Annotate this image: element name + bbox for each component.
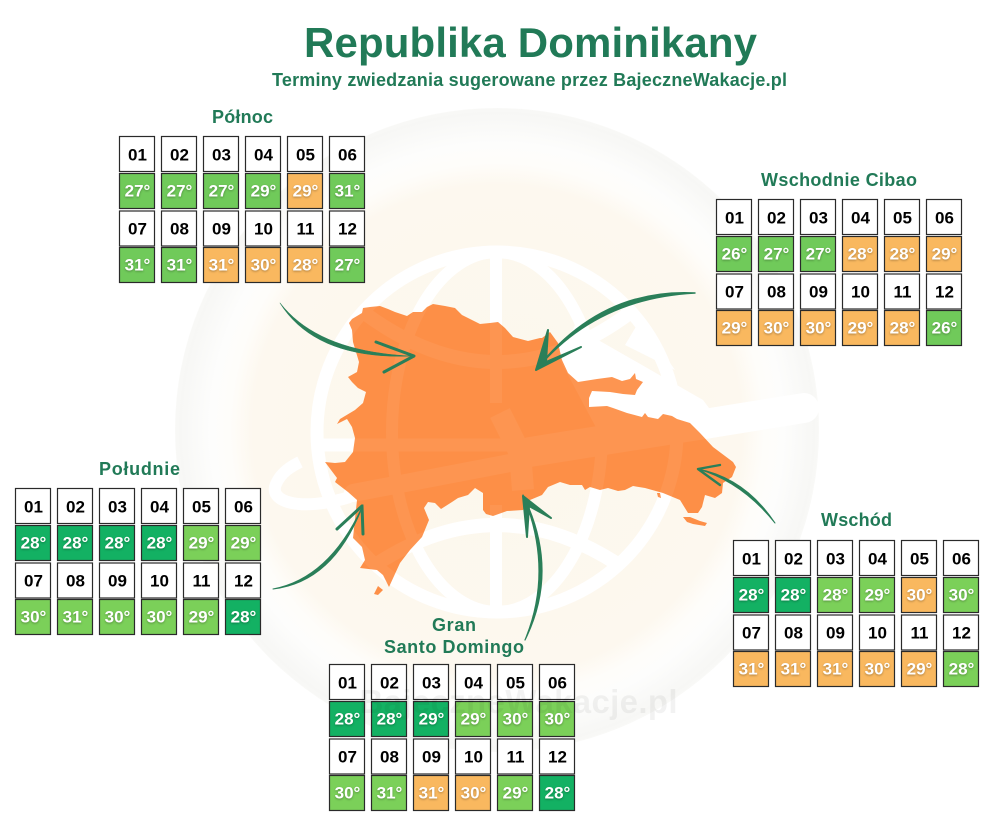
grid: Wschód months and temperatures: 02	[784, 550, 803, 568]
grid: Wschód months and temperatures: 11	[911, 624, 928, 642]
grid: Wschodnie Cibao months and temperatures: 08	[767, 282, 786, 302]
heading: Gran Santo Domingo: Santo Domingo	[384, 637, 524, 657]
grid: Wschód months and temperatures: 07	[742, 624, 761, 642]
grid: Wschodnie Cibao months and temperatures: 10	[851, 282, 870, 302]
grid: Północ months and temperatures: 28°	[293, 256, 319, 274]
grid: Wschodnie Cibao months and temperatures: 30°	[764, 318, 790, 338]
grid: Wschodnie Cibao months and temperatures: 30°	[806, 318, 832, 338]
grid: Wschodnie Cibao months and temperatures: 26°	[932, 318, 958, 338]
grid: Wschód months and temperatures: 28°	[739, 586, 765, 604]
grid: Wschód months and temperatures: 31°	[781, 660, 807, 678]
grid: Południe months and temperatures	[16, 488, 260, 634]
grid: Południe months and temperatures: 30°	[105, 608, 131, 626]
background watermark: globe and plane	[175, 108, 819, 752]
grid: Wschodnie Cibao months and temperatures: 01	[725, 208, 744, 228]
grid: Wschodnie Cibao months and temperatures	[716, 200, 962, 346]
grid: Wschodnie Cibao months and temperatures: 06	[935, 208, 954, 228]
grid: Południe months and temperatures: 30°	[21, 608, 47, 626]
heading: Wschodnie Cibao: Wschodnie Cibao	[761, 170, 917, 190]
grid: Gran Santo Domingo months and temperatures: 04	[464, 674, 483, 692]
grid: Wschód months and temperatures: 12	[952, 624, 971, 642]
grid: Północ months and temperatures: 12	[338, 220, 357, 238]
grid: Północ months and temperatures: 31°	[335, 182, 361, 200]
grid: Gran Santo Domingo months and temperatures: 30°	[545, 710, 571, 728]
watermark text: BajeczneWakacje.pl	[360, 683, 678, 720]
panel: Wschód	[734, 510, 978, 686]
grid: Północ months and temperatures: 31°	[167, 256, 193, 274]
grid: Wschód months and temperatures: 10	[868, 624, 887, 642]
arrow: Gran Santo Domingo to map	[523, 495, 551, 640]
grid: Północ months and temperatures: 27°	[167, 182, 193, 200]
grid: Gran Santo Domingo months and temperatures: 28°	[335, 710, 361, 728]
map: Dominican Republic	[325, 304, 736, 595]
grid: Gran Santo Domingo months and temperatures: 10	[464, 748, 483, 766]
heading: Wschód: Wschód	[821, 510, 892, 530]
grid: Wschodnie Cibao months and temperatures: 04	[851, 208, 870, 228]
grid: Gran Santo Domingo months and temperatures: 29°	[461, 710, 487, 728]
grid: Południe months and temperatures: 10	[150, 572, 169, 590]
heading: Gran Santo Domingo: Gran	[432, 615, 476, 635]
grid: Południe months and temperatures: 28°	[21, 534, 47, 552]
grid: Wschód months and temperatures: 30°	[865, 660, 891, 678]
grid: Wschód months and temperatures: 30°	[907, 586, 933, 604]
grid: Wschodnie Cibao months and temperatures: 27°	[806, 244, 832, 264]
grid: Południe months and temperatures: 01	[24, 498, 43, 516]
grid: Wschód months and temperatures: 29°	[865, 586, 891, 604]
grid: Gran Santo Domingo months and temperatures: 12	[548, 748, 567, 766]
grid: Wschód months and temperatures	[734, 540, 978, 686]
grid: Północ months and temperatures: 01	[128, 146, 147, 164]
grid: Wschodnie Cibao months and temperatures: 02	[767, 208, 786, 228]
grid: Południe months and temperatures: 08	[66, 572, 85, 590]
grid: Wschód months and temperatures: 29°	[907, 660, 933, 678]
grid: Południe months and temperatures: 04	[150, 498, 169, 516]
heading: Południe: Południe	[99, 459, 180, 479]
grid: Wschód months and temperatures: 31°	[823, 660, 849, 678]
grid: Gran Santo Domingo months and temperatures: 01	[338, 674, 357, 692]
grid: Wschodnie Cibao months and temperatures: 28°	[890, 318, 916, 338]
grid: Gran Santo Domingo months and temperatures: 11	[507, 748, 524, 766]
grid: Gran Santo Domingo months and temperatures: 07	[338, 748, 357, 766]
grid: Wschód months and temperatures: 09	[826, 624, 845, 642]
grid: Południe months and temperatures: 28°	[105, 534, 131, 552]
grid: Gran Santo Domingo months and temperatures: 30°	[335, 784, 361, 802]
grid: Wschodnie Cibao months and temperatures: 03	[809, 208, 828, 228]
grid: Wschód months and temperatures: 28°	[823, 586, 849, 604]
grid: Północ months and temperatures: 07	[128, 220, 147, 238]
grid: Wschód months and temperatures: 28°	[949, 660, 975, 678]
grid: Południe months and temperatures: 03	[108, 498, 127, 516]
grid: Północ months and temperatures: 31°	[209, 256, 235, 274]
grid: Południe months and temperatures: 28°	[147, 534, 173, 552]
grid: Południe months and temperatures: 12	[234, 572, 253, 590]
grid: Północ months and temperatures: 29°	[251, 182, 277, 200]
grid: Wschodnie Cibao months and temperatures: 12	[935, 282, 954, 302]
grid: Gran Santo Domingo months and temperatures: 29°	[419, 710, 445, 728]
grid: Północ months and temperatures: 02	[170, 146, 189, 164]
grid: Wschodnie Cibao months and temperatures: 28°	[848, 244, 874, 264]
grid: Południe months and temperatures: 30°	[147, 608, 173, 626]
grid: Północ months and temperatures: 29°	[293, 182, 319, 200]
grid: Wschodnie Cibao months and temperatures: 11	[894, 282, 911, 302]
grid: Gran Santo Domingo months and temperatures: 30°	[461, 784, 487, 802]
panel: Południe	[16, 459, 260, 634]
grid: Północ months and temperatures: 27°	[209, 182, 235, 200]
grid: Południe months and temperatures: 28°	[231, 608, 257, 626]
arrow: Północ to map	[280, 303, 414, 372]
grid: Wschód months and temperatures: 31°	[739, 660, 765, 678]
grid: Północ months and temperatures: 10	[254, 220, 273, 238]
panel: Wschodnie Cibao	[716, 170, 962, 346]
grid: Wschód months and temperatures: 05	[910, 550, 929, 568]
grid: Wschodnie Cibao months and temperatures: 09	[809, 282, 828, 302]
grid: Północ months and temperatures: 08	[170, 220, 189, 238]
grid: Gran Santo Domingo months and temperatures	[330, 664, 574, 810]
grid: Południe months and temperatures: 29°	[189, 534, 215, 552]
grid: Północ months and temperatures: 05	[296, 146, 315, 164]
grid: Wschodnie Cibao months and temperatures: 27°	[764, 244, 790, 264]
grid: Południe months and temperatures: 02	[66, 498, 85, 516]
grid: Gran Santo Domingo months and temperatures: 05	[506, 674, 525, 692]
grid: Północ months and temperatures: 03	[212, 146, 231, 164]
grid: Południe months and temperatures: 06	[234, 498, 253, 516]
grid: Gran Santo Domingo months and temperatures: 28°	[377, 710, 403, 728]
grid: Wschodnie Cibao months and temperatures: 29°	[848, 318, 874, 338]
map overlay: faint watermark over the island	[275, 252, 804, 612]
grid: Północ months and temperatures: 27°	[125, 182, 151, 200]
grid: Południe months and temperatures: 29°	[189, 608, 215, 626]
grid: Północ months and temperatures: 04	[254, 146, 273, 164]
heading: Gran Santo Domingo	[384, 615, 524, 657]
grid: Wschód months and temperatures: 06	[952, 550, 971, 568]
grid: Wschodnie Cibao months and temperatures: 07	[725, 282, 744, 302]
grid: Wschód months and temperatures: 04	[868, 550, 887, 568]
grid: Gran Santo Domingo months and temperatures: 31°	[419, 784, 445, 802]
grid: Gran Santo Domingo months and temperatures: 06	[548, 674, 567, 692]
grid: Gran Santo Domingo months and temperatures: 03	[422, 674, 441, 692]
grid: Południe months and temperatures: 31°	[63, 608, 89, 626]
grid: Wschód months and temperatures: 08	[784, 624, 803, 642]
grid: Południe months and temperatures: 05	[192, 498, 211, 516]
grid: Północ months and temperatures: 09	[212, 220, 231, 238]
grid: Wschodnie Cibao months and temperatures: 29°	[932, 244, 958, 264]
panel: Północ	[120, 107, 364, 282]
grid: Północ months and temperatures: 30°	[251, 256, 277, 274]
grid: Wschód months and temperatures: 03	[826, 550, 845, 568]
panel: Gran Santo Domingo	[330, 615, 574, 810]
grid: Północ months and temperatures: 31°	[125, 256, 151, 274]
grid: Wschodnie Cibao months and temperatures: 05	[893, 208, 912, 228]
arrow: Wschód to map	[698, 465, 775, 523]
grid: Gran Santo Domingo months and temperatures: 08	[380, 748, 399, 766]
title: Republika Dominikany	[304, 19, 758, 66]
grid: Gran Santo Domingo months and temperatures: 02	[380, 674, 399, 692]
grid: Wschód months and temperatures: 01	[742, 550, 761, 568]
grid: Południe months and temperatures: 11	[193, 572, 210, 590]
grid: Południe months and temperatures: 28°	[63, 534, 89, 552]
heading: Północ: Północ	[212, 107, 273, 127]
grid: Północ months and temperatures: 06	[338, 146, 357, 164]
grid: Gran Santo Domingo months and temperatures: 09	[422, 748, 441, 766]
grid: Wschodnie Cibao months and temperatures: 29°	[722, 318, 748, 338]
grid: Wschód months and temperatures: 28°	[781, 586, 807, 604]
grid: Południe months and temperatures: 07	[24, 572, 43, 590]
grid: Południe months and temperatures: 29°	[231, 534, 257, 552]
grid: Północ months and temperatures: 11	[297, 220, 314, 238]
grid: Wschód months and temperatures: 30°	[949, 586, 975, 604]
grid: Północ months and temperatures: 27°	[335, 256, 361, 274]
grid: Wschodnie Cibao months and temperatures: 28°	[890, 244, 916, 264]
grid: Gran Santo Domingo months and temperatures: 28°	[545, 784, 571, 802]
arrow: Południe to map	[273, 505, 363, 589]
grid: Północ months and temperatures	[120, 136, 364, 282]
grid: Gran Santo Domingo months and temperatures: 30°	[503, 710, 529, 728]
grid: Gran Santo Domingo months and temperatures: 29°	[503, 784, 529, 802]
subtitle: Terminy zwiedzania sugerowane przez BajeczneWakacje.pl	[272, 70, 787, 90]
grid: Wschodnie Cibao months and temperatures: 26°	[722, 244, 748, 264]
grid: Południe months and temperatures: 09	[108, 572, 127, 590]
arrow: Wschodnie Cibao to map	[536, 293, 695, 370]
grid: Gran Santo Domingo months and temperatures: 31°	[377, 784, 403, 802]
